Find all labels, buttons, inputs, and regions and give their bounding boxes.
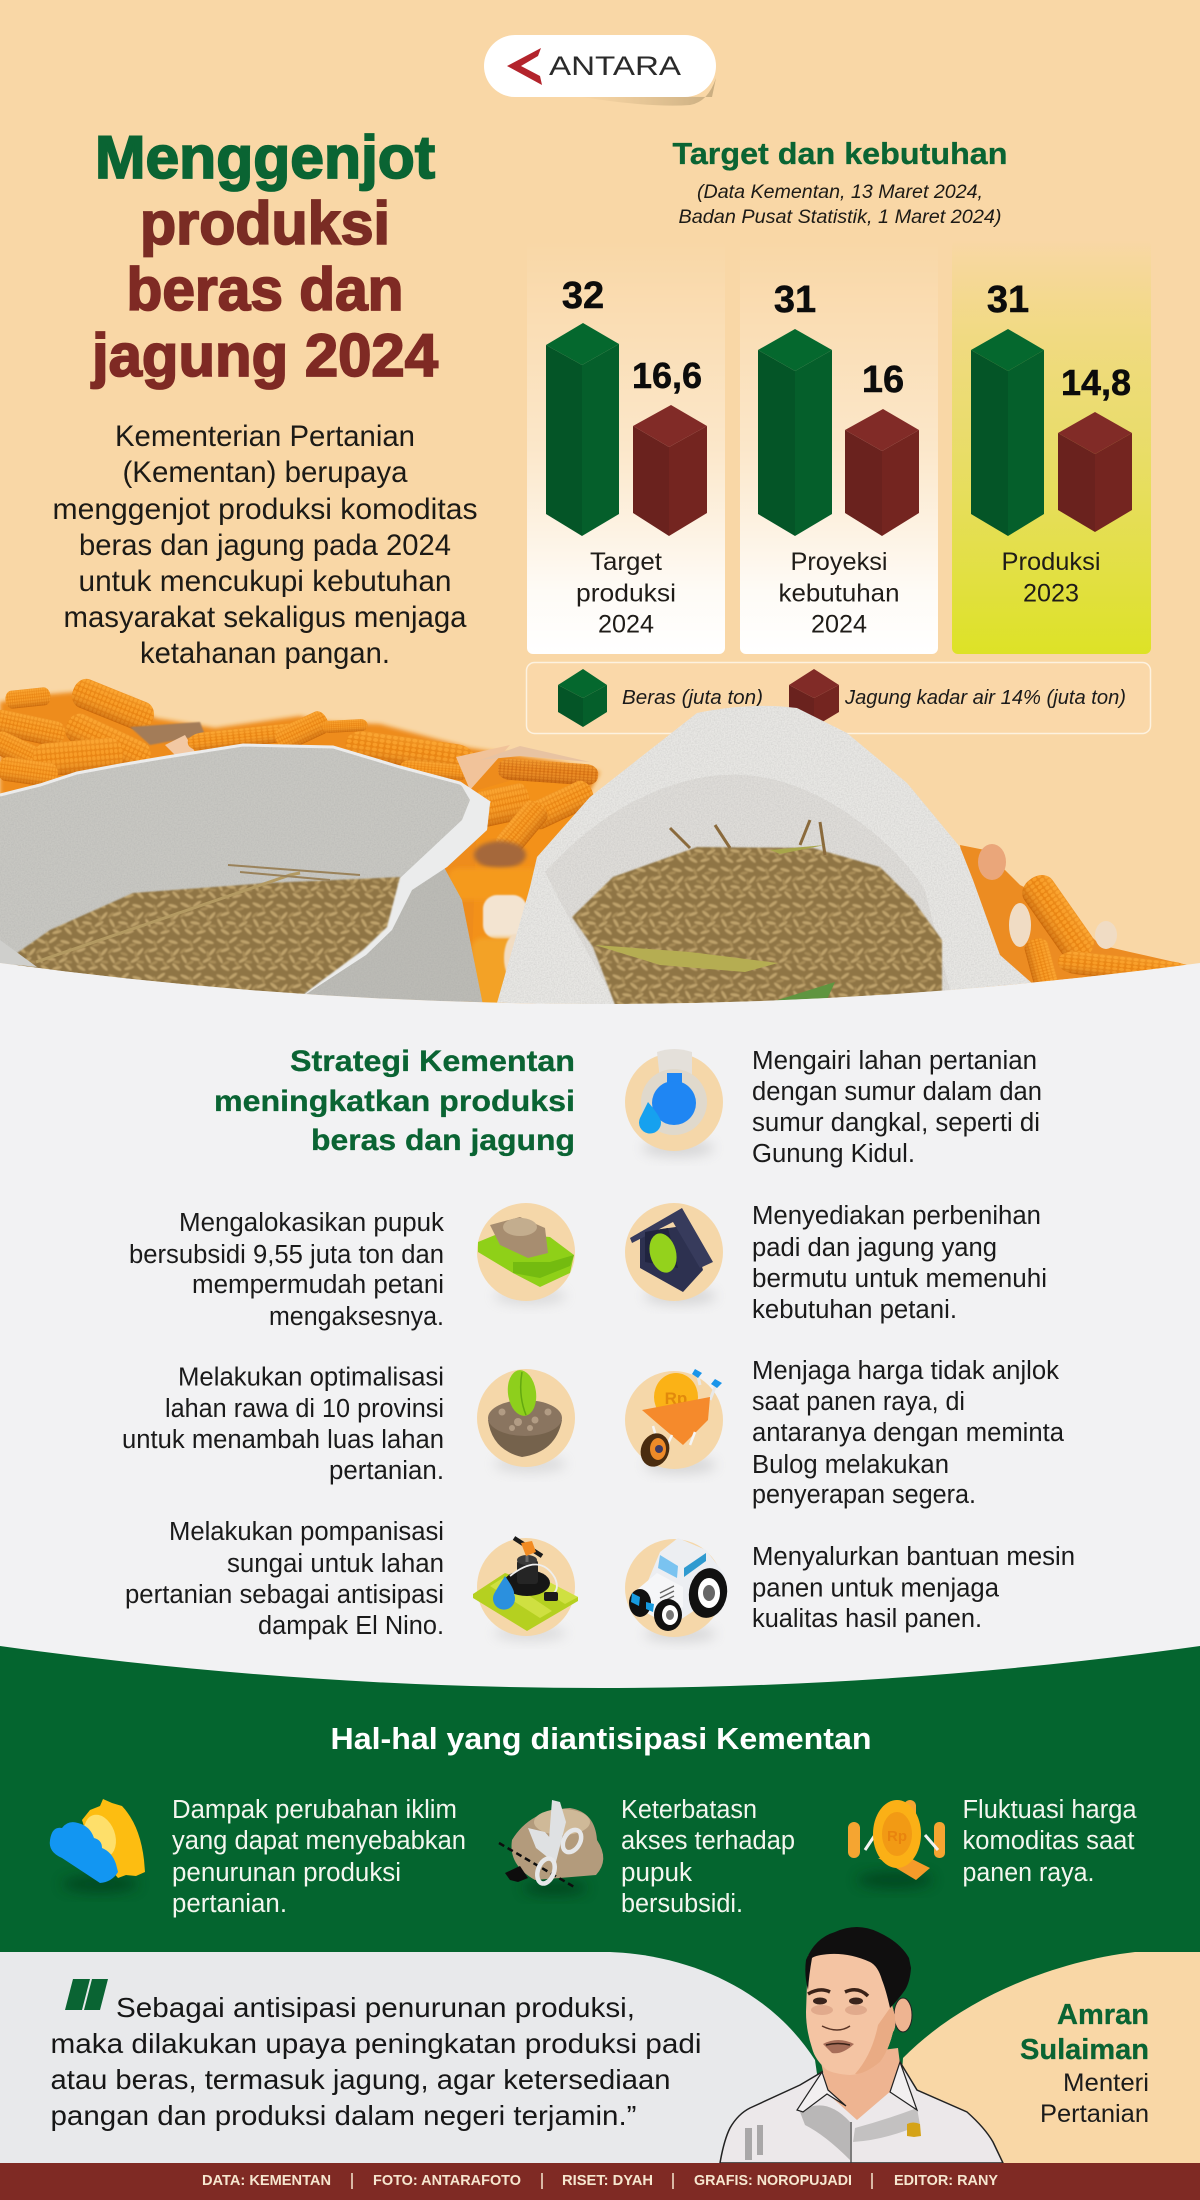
- panel: quote background: [0, 1952, 830, 2165]
- category label: produksi: [576, 580, 676, 608]
- bar chart: produksi 2023: [952, 240, 1151, 654]
- label: 32: 32: [562, 275, 604, 317]
- anticipation text: iklim: [172, 1796, 466, 1918]
- eyebrows, eyes, nose, mouth: [808, 1990, 868, 2053]
- panel: anticipation background: [0, 1646, 1200, 2170]
- strategy text: mesin panen: Menyalurkan bantuan mesin: [752, 1543, 1075, 1571]
- legend text: jagung: Jagung kadar air 14% (juta ton): [844, 687, 1126, 709]
- description text: [52, 420, 478, 670]
- anticipation text: harga: komoditas saat: [962, 1827, 1134, 1855]
- title: beras dan: [126, 256, 404, 323]
- bar: beras 31: [971, 329, 1044, 536]
- anticipation text: pupuk: pupuk: [621, 1859, 692, 1887]
- strategy text: lahan rawa: pertanian.: [329, 1457, 444, 1485]
- chart heading: Badan Pusat Statistik, 1 Maret 2024): [678, 207, 1002, 228]
- bar chart: target produksi 2024: [527, 240, 725, 654]
- legend text: beras: Beras (juta ton): [622, 687, 763, 709]
- anticipation text: iklim: yang dapat menyebabkan: [172, 1827, 466, 1855]
- strategy text: perbenihan: bermutu untuk memenuhi: [752, 1265, 1047, 1293]
- strategy text: sumur: sumur dangkal, seperti di: [752, 1109, 1040, 1137]
- anticipation text: pupuk: akses terhadap: [621, 1827, 795, 1855]
- strategy text: perbenihan: padi dan jagung yang: [752, 1234, 997, 1262]
- name and role: [1020, 1999, 1149, 2128]
- strategy text: pompanisasi: [125, 1518, 444, 1640]
- anticipation text: pupuk: Keterbatasn: [621, 1796, 757, 1824]
- strategy text: sumur: Mengairi lahan pertanian: [752, 1047, 1037, 1075]
- strategy heading: beras dan jagung: [311, 1124, 575, 1157]
- strategy text: perbenihan: Menyediakan perbenihan: [752, 1202, 1041, 1230]
- quote text: atau beras, termasuk jagung, agar ketersediaan: [50, 2064, 670, 2095]
- collar: [797, 2062, 917, 2112]
- chart heading: [672, 136, 1008, 228]
- chart heading: (Data Kementan, 13 Maret 2024,: [697, 182, 983, 203]
- label: 16,6: 16,6: [632, 355, 702, 396]
- portrait: Amran Sulaiman: [720, 1927, 1003, 2163]
- anticipation text: iklim: penurunan produksi: [172, 1859, 401, 1887]
- neck: [820, 2048, 900, 2120]
- name and role: Menteri: [1063, 2069, 1149, 2097]
- strategy text: perbenihan: kebutuhan petani.: [752, 1296, 957, 1324]
- quote text: maka dilakukan upaya peningkatan produksi padi: [50, 2028, 702, 2059]
- icon: coin on scale: Rp: [887, 1828, 907, 1845]
- footer: RISET: DYAH: [562, 2172, 653, 2189]
- description text: untuk mencukupi kebutuhan: [78, 565, 451, 598]
- strategy text: pompanisasi: sungai untuk lahan: [227, 1550, 444, 1578]
- category label: Proyeksi: [790, 548, 888, 576]
- icon: seed house: [625, 1203, 723, 1305]
- legend icon: beras: [558, 669, 607, 727]
- strategy text: harga: Menjaga harga tidak anjlok: [752, 1357, 1059, 1385]
- strategy text: sumur: Gunung Kidul.: [752, 1140, 915, 1168]
- category label: [778, 548, 900, 638]
- anticipation text: iklim: Dampak perubahan iklim: [172, 1796, 457, 1824]
- bar: beras 31: [758, 329, 832, 536]
- footer: GRAFIS: NOROPUJADI: [694, 2172, 852, 2189]
- title: jagung 2024: [91, 322, 439, 389]
- description text: beras dan jagung pada 2024: [79, 529, 451, 562]
- corn pile: middle: [448, 745, 599, 1010]
- panel: strategy background: [0, 963, 1200, 1700]
- icon: tractor: [625, 1538, 731, 1642]
- anticipation text: pupuk: [621, 1796, 795, 1918]
- ear: [894, 1998, 912, 2032]
- label: 14,8: 14,8: [1061, 362, 1131, 403]
- strategy text: lahan rawa: lahan rawa di 10 provinsi: [165, 1395, 444, 1423]
- strategy text: lahan rawa: Melakukan optimalisasi: [178, 1364, 444, 1392]
- name and role: Pertanian: [1040, 2100, 1149, 2128]
- footer: EDITOR: RANY: [894, 2172, 998, 2189]
- category label: Produksi: [1002, 548, 1100, 576]
- photo: rice sacks on corn: [0, 675, 1193, 1010]
- badge: [907, 2122, 921, 2137]
- strategy text: sumur: dengan sumur dalam dan: [752, 1078, 1042, 1106]
- strategy text: mesin panen: panen untuk menjaga: [752, 1574, 1000, 1602]
- icon: plant in soil: [477, 1368, 575, 1473]
- anticipation text: pupuk: bersubsidi.: [621, 1890, 743, 1918]
- corn pile: right: [960, 844, 1187, 988]
- category label: [1002, 548, 1100, 608]
- label: 31: 31: [987, 279, 1029, 321]
- footer: DATA: KEMENTAN: [202, 2172, 331, 2189]
- icon: coin on scale: [848, 1800, 945, 1889]
- label: 16: 16: [862, 359, 904, 401]
- strategy text: pompanisasi: Melakukan pompanisasi: [169, 1518, 444, 1546]
- strategy heading: meningkatkan produksi: [214, 1085, 575, 1118]
- strategy text: sumur: [752, 1047, 1042, 1168]
- strategy text: pompanisasi: pertanian sebagai antisipasi: [125, 1581, 444, 1609]
- name and role: Amran: [1057, 1999, 1149, 2031]
- name and role: Sulaiman: [1020, 2034, 1149, 2066]
- description text: masyarakat sekaligus menjaga: [64, 601, 467, 634]
- icon: water flask: [625, 1049, 723, 1157]
- hair: [805, 1927, 911, 2008]
- corn pile: left: [0, 675, 600, 1010]
- strategy heading: Strategi Kementan: [290, 1045, 575, 1078]
- strategy text: perbenihan: [752, 1202, 1047, 1324]
- chart heading: Target dan kebutuhan: [672, 136, 1008, 171]
- description text: Kementerian Pertanian: [115, 420, 415, 453]
- anticipation heading: Hal-hal yang diantisipasi Kementan: [330, 1721, 872, 1756]
- bar: jagung 16,6: [633, 405, 707, 536]
- icon: fertiliser rock on field: [477, 1203, 575, 1305]
- icon: wheelbarrow with coin: [625, 1369, 723, 1474]
- legend icon: jagung: [789, 669, 839, 727]
- strategy text: pupuk: bersubsidi 9,55 juta ton dan: [129, 1241, 444, 1269]
- face: [806, 1953, 895, 2075]
- quote text: pangan dan produksi dalam negeri terjamin.”: [50, 2100, 636, 2131]
- strategy text: lahan rawa: untuk menambah luas lahan: [122, 1426, 444, 1454]
- description text: (Kementan) berupaya: [122, 456, 408, 489]
- category label: 2023: [1023, 580, 1079, 608]
- bar chart: proyeksi kebutuhan 2024: [740, 240, 938, 654]
- category label: Target: [590, 548, 662, 576]
- strategy text: pompanisasi: dampak El Nino.: [258, 1612, 444, 1640]
- label: 31: 31: [774, 279, 816, 321]
- category label: [576, 548, 676, 638]
- strategy text: harga: saat panen raya, di: [752, 1388, 965, 1416]
- anticipation text: harga: panen raya.: [962, 1859, 1094, 1887]
- description text: menggenjot produksi komoditas: [52, 493, 478, 526]
- icon: scissors cutting fertiliser: [499, 1800, 603, 1896]
- bar: jagung 16: [845, 409, 919, 536]
- logo: ANTARA: [484, 35, 716, 106]
- logo: ANTARA: ANTARA: [549, 51, 681, 81]
- strategy text: harga: Bulog melakukan: [752, 1451, 949, 1479]
- footer: FOTO: ANTARAFOTO: [373, 2172, 521, 2189]
- quote text: [50, 1992, 702, 2131]
- quote mark: [65, 1979, 108, 2010]
- strategy text: mesin panen: [752, 1543, 1075, 1633]
- strategy text: harga: [752, 1357, 1065, 1509]
- icon: water pump: [473, 1538, 578, 1641]
- description text: ketahanan pangan.: [140, 637, 390, 670]
- strategy text: pupuk: [129, 1209, 444, 1331]
- sack: left: [0, 745, 490, 1010]
- anticipation text: iklim: pertanian.: [172, 1890, 287, 1918]
- title: produksi: [140, 190, 390, 257]
- bar: beras 32: [546, 323, 619, 536]
- anticipation text: harga: Fluktuasi harga: [962, 1796, 1137, 1824]
- title: [91, 124, 439, 389]
- rice: left sack: [0, 864, 401, 994]
- strategy text: pupuk: mengaksesnya.: [269, 1303, 444, 1331]
- strategy text: harga: antaranya dengan meminta: [752, 1419, 1065, 1447]
- strategy text: pupuk: Mengalokasikan pupuk: [179, 1209, 444, 1237]
- shirt: [720, 2062, 1003, 2163]
- bar: jagung 14,8: [1058, 412, 1132, 532]
- icon: climate cloud and sun: [50, 1799, 145, 1893]
- rice: right sack: [572, 820, 942, 1010]
- strategy text: harga: penyerapan segera.: [752, 1481, 976, 1509]
- category label: 2024: [598, 610, 654, 638]
- strategy text: lahan rawa: [122, 1364, 444, 1485]
- icon: wheelbarrow with coin: Rp: [665, 1389, 687, 1408]
- anticipation text: harga: [962, 1796, 1137, 1887]
- category label: 2024: [811, 610, 867, 638]
- title: Menggenjot: [95, 124, 435, 191]
- footer: [0, 2163, 1200, 2200]
- legend: [526, 662, 1150, 734]
- quote text: Sebagai antisipasi penurunan produksi,: [116, 1992, 635, 2023]
- panel: name background: [895, 1952, 1200, 2165]
- strategy text: pupuk: mempermudah petani: [192, 1271, 444, 1299]
- sack: right: [495, 706, 1042, 1010]
- strategy text: mesin panen: kualitas hasil panen.: [752, 1605, 982, 1633]
- category label: kebutuhan: [778, 580, 900, 608]
- strategy heading: [214, 1045, 575, 1157]
